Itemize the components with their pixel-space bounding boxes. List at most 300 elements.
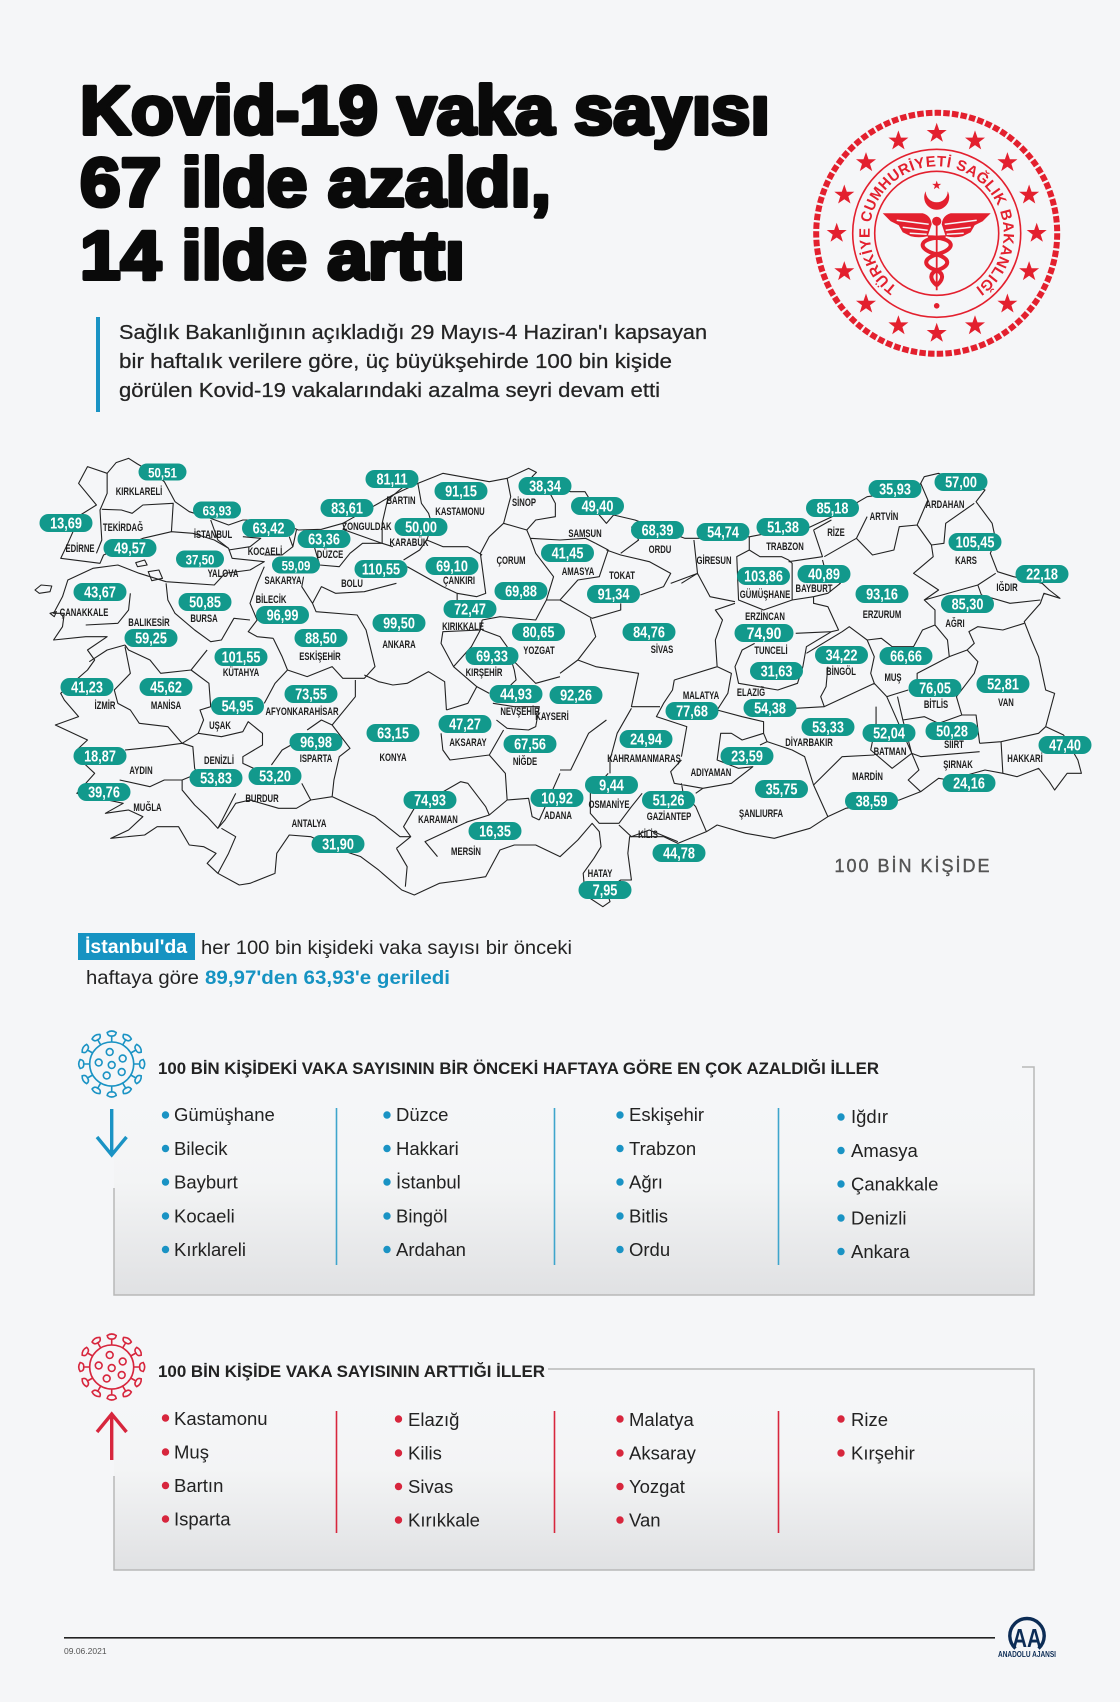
- value: Elazığ: [744, 699, 796, 718]
- value: Artvin: [868, 480, 922, 499]
- value: Sivas: 84,76: [633, 624, 665, 642]
- value: Tekirdağ: 49,57: [114, 540, 146, 558]
- value: Amasya: 41,45: [552, 545, 583, 563]
- list: column 2: Elazığ: [408, 1409, 459, 1430]
- province names: TRABZON: [766, 541, 804, 553]
- list: column 1: Isparta: [174, 1508, 231, 1530]
- province names: SİİRT: [944, 739, 964, 751]
- value: Kars: [948, 533, 1002, 552]
- province names: ANKARA: [382, 639, 416, 651]
- intro text: Sağlık Bakanlığının açıkladığı 29 Mayıs-4 Haziran'ı kapsayan: [119, 322, 707, 344]
- province names: BALIKESİR: [128, 617, 170, 629]
- value: Yalova: [176, 550, 224, 568]
- province names: KÜTAHYA: [223, 667, 259, 679]
- value: Kırklareli: 50,51: [148, 464, 177, 481]
- intro bar: [96, 317, 100, 412]
- value: Bursa: 50,85: [189, 594, 221, 612]
- value: Karabük: 50,00: [405, 519, 437, 537]
- value: Kütahya: [214, 648, 268, 667]
- value: Gümüşhane: 103,86: [744, 568, 783, 586]
- value: Çanakkale: [74, 583, 126, 602]
- value: Giresun: [696, 523, 750, 542]
- list: column 3: Ağrı: [629, 1172, 663, 1192]
- province names: ADIYAMAN: [691, 767, 731, 779]
- value: Kahramanmaraş: [620, 730, 672, 749]
- list: column 2: Kilis: [408, 1442, 442, 1464]
- callout: İstanbul: her 100 bin kişideki vaka sayısı bir önceki: [201, 937, 572, 959]
- value: Diyarbakır: 53,33: [812, 719, 844, 737]
- province names: EDİRNE: [65, 543, 95, 555]
- province names: DÜZCE: [317, 549, 343, 561]
- list: column 4: Iğdır: [851, 1106, 888, 1127]
- value: Gaziantep: 51,26: [653, 792, 684, 810]
- value: Tunceli: 31,63: [761, 663, 792, 681]
- province names: KONYA: [379, 752, 407, 764]
- value: Şırnak: 24,16: [953, 775, 985, 793]
- value: Bolu: 110,55: [362, 561, 400, 579]
- value: Bolu: [354, 560, 408, 579]
- province names: BAYBURT: [796, 583, 833, 595]
- value: Antalya: [312, 835, 364, 854]
- value: Rize: [806, 499, 859, 518]
- list: column 1: Kastamonu: [174, 1408, 268, 1429]
- logo: Anadolu Ajansı: ANADOLU AJANSI: [998, 1649, 1056, 1659]
- province names: TUNCELİ: [754, 645, 788, 657]
- callout: İstanbul: haftaya göre: [86, 967, 199, 989]
- value: Sakarya: [272, 556, 320, 574]
- value: Malatya: [666, 702, 718, 721]
- title: Kovid-19 vaka sayısı: [80, 72, 770, 149]
- value: Malatya: 77,68: [676, 703, 708, 721]
- province names: ANTALYA: [292, 818, 326, 830]
- list: column 2: Düzce: [396, 1104, 448, 1125]
- province names: AĞRI: [945, 617, 965, 630]
- list: column 3: Eskişehir: [629, 1104, 704, 1125]
- value: Samsun: [571, 497, 624, 516]
- value: Zonguldak: 83,61: [331, 500, 363, 518]
- province names: KIRŞEHİR: [466, 667, 502, 679]
- value: Tokat: 91,34: [598, 586, 629, 604]
- province names: ŞANLIURFA: [739, 808, 783, 820]
- province names: KİLİS: [638, 829, 658, 841]
- footer date: 09.06.2021: [64, 1646, 107, 1656]
- province names: ELAZIĞ: [737, 686, 765, 699]
- province names: BİNGÖL: [826, 666, 856, 678]
- value: Amasya: [541, 544, 594, 563]
- province names: MANİSA: [151, 700, 181, 712]
- value: Konya: [366, 724, 420, 743]
- value: Kastamonu: 91,15: [445, 483, 477, 501]
- province names: ERZURUM: [863, 609, 901, 621]
- value: Kırşehir: 69,33: [476, 648, 508, 666]
- value: Düzce: 63,36: [308, 531, 340, 549]
- value: Muğla: 39,76: [88, 784, 120, 802]
- value: Mardin: [845, 792, 898, 811]
- value: Çorum: [494, 582, 548, 601]
- value: Adana: [530, 789, 584, 808]
- value: Iğdır: [1016, 565, 1068, 584]
- province names: BURSA: [190, 613, 218, 625]
- value: Batman: [862, 724, 916, 743]
- value: Samsun: 49,40: [582, 498, 613, 516]
- value: Yozgat: 80,65: [523, 624, 554, 642]
- value: Çorum: 69,88: [505, 583, 537, 601]
- value: Elazığ: 54,38: [754, 700, 786, 718]
- list: column 3: Aksaray: [629, 1442, 697, 1464]
- value: Isparta: 96,98: [300, 734, 332, 752]
- panel: decreased provinces: [79, 1031, 1034, 1295]
- value: Balıkesir: [124, 629, 178, 648]
- value: Şanlıurfa: 35,75: [766, 781, 797, 799]
- value pills: [40, 464, 1092, 900]
- list: column 4: Çanakkale: [851, 1174, 938, 1194]
- province names: IĞDIR: [996, 581, 1018, 594]
- list: column 1: Bayburt: [174, 1172, 238, 1192]
- map outline and provinces: [35, 458, 1081, 907]
- list: column 3: Ordu: [629, 1239, 670, 1260]
- value: Adana: 10,92: [541, 790, 573, 808]
- value: Ordu: [631, 521, 684, 540]
- value: Gaziantep: [642, 791, 695, 810]
- value: Hakkari: [1038, 736, 1092, 755]
- value: Yozgat: [512, 623, 565, 642]
- value: Bartın: [366, 470, 418, 489]
- value: Bayburt: [798, 565, 850, 584]
- value: Siirt: [926, 722, 978, 741]
- callout: İstanbul: İstanbul'da: [85, 935, 187, 958]
- value: Ağrı: 85,30: [952, 596, 983, 614]
- value: Ordu: 68,39: [642, 522, 673, 540]
- value: Kırklareli: [138, 464, 186, 481]
- value: Aydın: 18,87: [84, 748, 116, 766]
- value: Bingöl: [815, 646, 868, 665]
- value: Kırıkkale: [444, 600, 496, 619]
- province names: HAKKARİ: [1007, 753, 1043, 765]
- value: Sinop: 38,34: [529, 478, 561, 496]
- value: Erzurum: 93,16: [866, 586, 898, 604]
- title: 67 ilde azaldı,: [80, 144, 551, 221]
- value: İstanbul: 63,93: [203, 502, 231, 519]
- footer rule: [64, 1637, 995, 1639]
- value: Şırnak: [942, 774, 996, 793]
- province names: ISPARTA: [300, 753, 332, 765]
- value: Ardahan: [934, 473, 988, 492]
- value: Antalya: 31,90: [322, 836, 354, 854]
- value: Karaman: [404, 791, 456, 810]
- icon: blue virus: [79, 1031, 145, 1097]
- value: Burdur: 53,20: [259, 768, 291, 786]
- province names: ŞIRNAK: [943, 759, 973, 771]
- list: column 1: Bartın: [174, 1475, 223, 1496]
- value: Osmaniye: 9,44: [599, 777, 624, 795]
- value: Niğde: [504, 735, 556, 754]
- value: Muş: 66,66: [890, 648, 922, 666]
- value: Trabzon: [756, 518, 810, 537]
- value: Adıyaman: [720, 747, 774, 766]
- value: Burdur: [248, 767, 302, 786]
- province names: NEVŞEHİR: [500, 706, 540, 718]
- province names: MALATYA: [683, 690, 719, 702]
- intro text: bir haftalık verilere göre, üç büyükşehirde 100 bin kişide: [119, 351, 672, 373]
- list: column 2: Ardahan: [396, 1239, 466, 1260]
- value: Sivas: [622, 623, 676, 642]
- value: Rize: 85,18: [817, 500, 848, 518]
- list: column 4: Rize: [851, 1409, 888, 1430]
- heading: increased: 100 BİN KİŞİDE VAKA SAYISININ ARTTIĞI İLLER: [158, 1362, 545, 1381]
- value: Yalova: 37,50: [186, 551, 214, 568]
- value: Ağrı: [941, 595, 994, 614]
- province names: ESKİŞEHİR: [299, 651, 341, 663]
- province names: ARDAHAN: [926, 499, 965, 511]
- value: Bursa: [178, 593, 232, 612]
- value: Hatay: 7,95: [593, 882, 617, 900]
- list: column 4: Amasya: [851, 1140, 919, 1161]
- map unit caption: 100 BİN KİŞİDE: [834, 856, 992, 876]
- list: column 3: Trabzon: [629, 1138, 696, 1159]
- list: column 4: Denizli: [851, 1208, 907, 1228]
- title: 14 ilde arttı: [80, 217, 465, 294]
- province names: ÇORUM: [496, 555, 526, 567]
- list: column 2: Sivas: [408, 1476, 453, 1497]
- province names: RİZE: [827, 527, 845, 539]
- province names: OSMANİYE: [588, 799, 630, 811]
- value: Şanlıurfa: [755, 780, 808, 799]
- list: column 3: [616, 1104, 704, 1260]
- value: Karaman: 74,93: [414, 792, 446, 810]
- province names: YALOVA: [208, 568, 239, 580]
- value: Adıyaman: 23,59: [731, 748, 763, 766]
- value: Erzincan: 74,90: [747, 625, 781, 643]
- value: Kırıkkale: 72,47: [454, 601, 486, 619]
- value: Denizli: 53,83: [200, 770, 232, 788]
- province names: KAHRAMANMARAŞ: [607, 753, 681, 765]
- value: Bingöl: 34,22: [826, 647, 857, 665]
- province names: BOLU: [341, 578, 363, 590]
- value: Çankırı: [426, 557, 478, 576]
- province names: KIRIKKALE: [442, 621, 484, 633]
- province names: [60, 486, 1043, 880]
- province names: BURDUR: [245, 793, 279, 805]
- province names: AKSARAY: [449, 737, 487, 749]
- list: column 1: Muş: [174, 1442, 209, 1462]
- list: column 2: [383, 1104, 466, 1260]
- icon: Ministry of Health seal: [813, 110, 1060, 357]
- province names: ÇANAKKALE: [60, 607, 108, 619]
- value: Iğdır: 22,18: [1026, 566, 1058, 584]
- value: Nevşehir: 44,93: [500, 686, 532, 704]
- province names: VAN: [998, 697, 1014, 709]
- list: column 1: [162, 1408, 268, 1530]
- province names: MUĞLA: [133, 801, 162, 814]
- callout: İstanbul: [78, 933, 572, 989]
- value: Denizli: [190, 769, 242, 788]
- list: column 4: [837, 1409, 915, 1464]
- value: Zonguldak: [320, 499, 374, 518]
- province names: AMASYA: [562, 566, 594, 578]
- value: Hakkari: 47,40: [1049, 737, 1081, 755]
- value: Osmaniye: [585, 776, 638, 795]
- list: column 3: Bitlis: [629, 1206, 668, 1226]
- value: Mardin: 38,59: [856, 793, 887, 811]
- logo: Anadolu Ajansı: [998, 1619, 1056, 1659]
- value: Edirne: [40, 514, 92, 533]
- value: Muğla: [78, 783, 130, 802]
- province names: MUŞ: [884, 672, 902, 684]
- value: Kahramanmaraş: 24,94: [630, 731, 662, 749]
- value: Isparta: [290, 733, 342, 752]
- value: Aksaray: [438, 715, 492, 734]
- list: column 1: Bilecik: [174, 1138, 228, 1159]
- value: Konya: 63,15: [377, 725, 409, 743]
- arrow: down: [97, 1109, 126, 1155]
- value: Muş: [880, 647, 932, 666]
- value: Diyarbakır: [802, 718, 854, 737]
- value: Giresun: 54,74: [707, 524, 739, 542]
- list: column 3: Van: [629, 1510, 661, 1530]
- list: column 4: Ankara: [851, 1241, 910, 1262]
- value: İzmir: [60, 678, 114, 697]
- province names: SİNOP: [512, 497, 536, 509]
- province names: DENİZLİ: [204, 755, 234, 767]
- province names: SİVAS: [651, 644, 673, 656]
- value: Kocaeli: 63,42: [253, 520, 284, 538]
- value: Bayburt: 40,89: [808, 566, 840, 584]
- list: column 4: [837, 1106, 938, 1262]
- province names: MERSİN: [451, 846, 481, 858]
- value: Çanakkale: 43,67: [84, 584, 116, 602]
- value: Bilecik: 96,99: [267, 607, 298, 625]
- province names: HATAY: [588, 868, 613, 880]
- province names: GÜMÜŞHANE: [740, 589, 790, 601]
- province names: AFYONKARAHİSAR: [265, 706, 339, 718]
- province names: GİRESUN: [696, 555, 732, 567]
- value: Tunceli: [750, 662, 803, 681]
- panel: increased provinces: [79, 1334, 1034, 1570]
- icon: red virus: [79, 1334, 145, 1400]
- value: Afyonkarahisar: 73,55: [295, 686, 327, 704]
- value: Eskişehir: [294, 629, 348, 648]
- list: column 1: Kırklareli: [174, 1239, 246, 1260]
- list: column 3: Yozgat: [629, 1476, 685, 1497]
- province names: BARTIN: [386, 495, 416, 507]
- value: Aksaray: 47,27: [449, 716, 481, 734]
- province names: ÇANKIRI: [443, 575, 475, 587]
- province names: KASTAMONU: [435, 506, 485, 518]
- province names: ARTVİN: [870, 511, 898, 523]
- value: Mersin: [468, 822, 522, 841]
- value: Aydın: [74, 747, 126, 766]
- value: Ankara: 99,50: [383, 615, 415, 633]
- value: Trabzon: 51,38: [767, 519, 799, 537]
- value: Gümüşhane: [737, 567, 790, 586]
- province names: KARABÜK: [390, 537, 429, 549]
- province names: ERZİNCAN: [745, 611, 785, 623]
- value: Sakarya: 59,09: [282, 557, 310, 574]
- value: Edirne: 13,69: [50, 515, 82, 533]
- value: Bitlis: [908, 679, 962, 698]
- province names: DİYARBAKIR: [785, 737, 833, 749]
- value: Manisa: 45,62: [150, 679, 182, 697]
- value: İzmir: 41,23: [71, 679, 103, 697]
- value: Kayseri: [550, 686, 602, 705]
- value: Kilis: [652, 844, 706, 863]
- province names: ADANA: [544, 810, 572, 822]
- value: Afyonkarahisar: [284, 685, 338, 704]
- province names: KARAMAN: [418, 814, 458, 826]
- province names: KIRKLARELİ: [116, 486, 162, 498]
- province names: KOCAELİ: [248, 546, 282, 558]
- heading: decreased: 100 BİN KİŞİDEKİ VAKA SAYISININ BİR ÖNCEKİ HAFTAYA GÖRE EN ÇOK AZALDIĞI İLLER: [158, 1059, 879, 1078]
- province names: AYDIN: [129, 765, 153, 777]
- value: Erzincan: [734, 624, 794, 643]
- value: Bilecik: [256, 606, 309, 625]
- province names: BATMAN: [874, 746, 906, 758]
- province names: ZONGULDAK: [342, 521, 392, 533]
- value: Ankara: [372, 614, 426, 633]
- value: Uşak: [211, 697, 264, 716]
- icon: Ministry of Health seal: TÜRKİYE CUMHURİYETİ SAĞLIK BAKANLIĞI: [859, 154, 1014, 296]
- value: Kastamonu: [434, 482, 488, 501]
- list: column 2: Bingöl: [396, 1206, 447, 1226]
- value: İstanbul: [193, 502, 241, 519]
- value: Ardahan: 57,00: [945, 474, 977, 492]
- province names: KAYSERİ: [535, 711, 569, 723]
- list: column 2: Hakkari: [396, 1138, 459, 1159]
- callout: İstanbul: 89,97'den 63,93'e geriledi: [205, 967, 450, 989]
- value: Tekirdağ: [104, 539, 156, 558]
- province names: UŞAK: [209, 720, 231, 732]
- intro text: görülen Kovid-19 vakalarındaki azalma seyri devam etti: [119, 380, 660, 402]
- list: column 3: [616, 1409, 697, 1530]
- value: Kırşehir: [466, 647, 518, 666]
- value: Mersin: 16,35: [479, 823, 511, 841]
- province names: NİĞDE: [513, 755, 537, 768]
- value: Van: 52,81: [987, 676, 1019, 694]
- value: Siirt: 50,28: [936, 723, 968, 741]
- value: Kars: 105,45: [956, 534, 995, 552]
- value: Bartın: 81,11: [376, 471, 408, 489]
- value: Batman: 52,04: [873, 725, 905, 743]
- value: Niğde: 67,56: [514, 736, 546, 754]
- value: Uşak: 54,95: [222, 698, 253, 716]
- value: Eskişehir: 88,50: [305, 630, 337, 648]
- logo: Anadolu Ajansı: AA: [1012, 1624, 1042, 1653]
- intro text: [119, 322, 707, 402]
- province names: YOZGAT: [523, 645, 555, 657]
- value: Hatay: [578, 881, 632, 900]
- province names: TEKİRDAĞ: [103, 521, 143, 534]
- value: Erzurum: [856, 585, 908, 604]
- province names: GAZİANTEP: [647, 811, 691, 823]
- value: Kütahya: 101,55: [222, 649, 261, 667]
- value: Nevşehir: [490, 685, 542, 704]
- value: Balıkesir: 59,25: [135, 630, 167, 648]
- list: column 4: Kırşehir: [851, 1442, 915, 1464]
- province names: TOKAT: [609, 570, 635, 582]
- province names: BİLECİK: [256, 594, 286, 606]
- value: Manisa: [140, 678, 192, 697]
- value: Düzce: [298, 530, 350, 549]
- province names: KARS: [955, 555, 977, 567]
- value: Çankırı: 69,10: [436, 558, 468, 576]
- province names: SAMSUN: [568, 528, 602, 540]
- list: column 1: Gümüşhane: [174, 1104, 275, 1125]
- map of Turkey: [35, 458, 1091, 907]
- province names: MARDİN: [852, 771, 883, 783]
- list: column 2: İstanbul: [396, 1172, 461, 1192]
- value: Bitlis: 76,05: [919, 680, 951, 698]
- value: Van: [976, 675, 1030, 694]
